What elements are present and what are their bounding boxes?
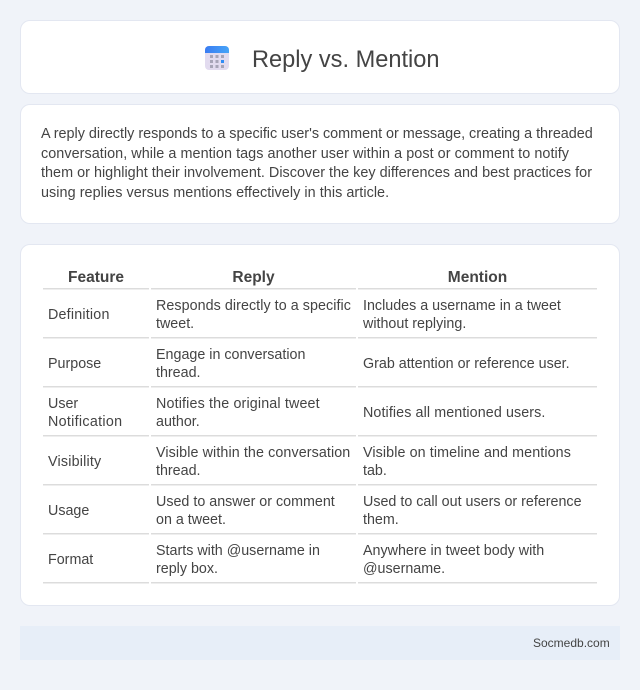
row: User Notification: Notification: [48, 414, 122, 430]
comparison table: Used to call out users or reference: [363, 494, 582, 510]
comparison table: Includes a username in a tweet: [363, 298, 561, 314]
header: Mention: Mention: [448, 269, 507, 286]
footer bar: [20, 626, 620, 660]
comparison table: @username.: [363, 561, 445, 577]
title: Reply vs. Mention: [252, 47, 440, 73]
row: Purpose: Purpose: [48, 356, 101, 372]
row: Usage: Usage: [48, 503, 89, 519]
comparison table: [43, 269, 597, 584]
intro text: [41, 126, 593, 200]
comparison table: Grab attention or reference user.: [363, 356, 570, 372]
comparison table: Visible on timeline and mentions: [363, 445, 571, 461]
row: Definition: Definition: [48, 307, 110, 323]
header: Reply: Reply: [232, 269, 275, 286]
row: User Notification: [48, 396, 122, 430]
icon: calendar: [205, 46, 229, 70]
comparison table: Starts with @username in: [156, 543, 320, 559]
table card: [20, 244, 620, 606]
footer text: Socmedb.com: [533, 636, 610, 650]
comparison table: tab.: [363, 463, 387, 479]
comparison table: Engage in conversation: [156, 347, 305, 363]
comparison table: Notifies all mentioned users.: [363, 405, 546, 421]
comparison table: reply box.: [156, 561, 218, 577]
comparison table: on a tweet.: [156, 512, 226, 528]
comparison table: Responds directly to a specific: [156, 298, 351, 314]
intro card: [20, 104, 620, 224]
intro text: them or highlight their involvement. Discover the key differences and best practices for: [41, 165, 592, 181]
comparison table: Anywhere in tweet body with: [363, 543, 544, 559]
intro text: conversation, while a mention tags another user within a post or comment to notify: [41, 146, 569, 162]
comparison table: author.: [156, 414, 200, 430]
comparison table: thread.: [156, 463, 201, 479]
header: Feature: Feature: [68, 269, 124, 286]
row: User Notification: User: [48, 396, 78, 412]
comparison table: tweet.: [156, 316, 194, 332]
row: Format: Format: [48, 552, 93, 568]
comparison table: without replying.: [363, 316, 466, 332]
comparison table: Visible within the conversation: [156, 445, 350, 461]
comparison table: Used to answer or comment: [156, 494, 335, 510]
intro text: A reply directly responds to a specific user's comment or message, creating a threaded: [41, 126, 593, 142]
row: Visibility: Visibility: [48, 454, 101, 470]
comparison table: thread.: [156, 365, 201, 381]
comparison table: them.: [363, 512, 399, 528]
title card: [20, 20, 620, 94]
comparison table: Notifies the original tweet: [156, 396, 320, 412]
intro text: using replies versus mentions effectively in this article.: [41, 184, 389, 200]
